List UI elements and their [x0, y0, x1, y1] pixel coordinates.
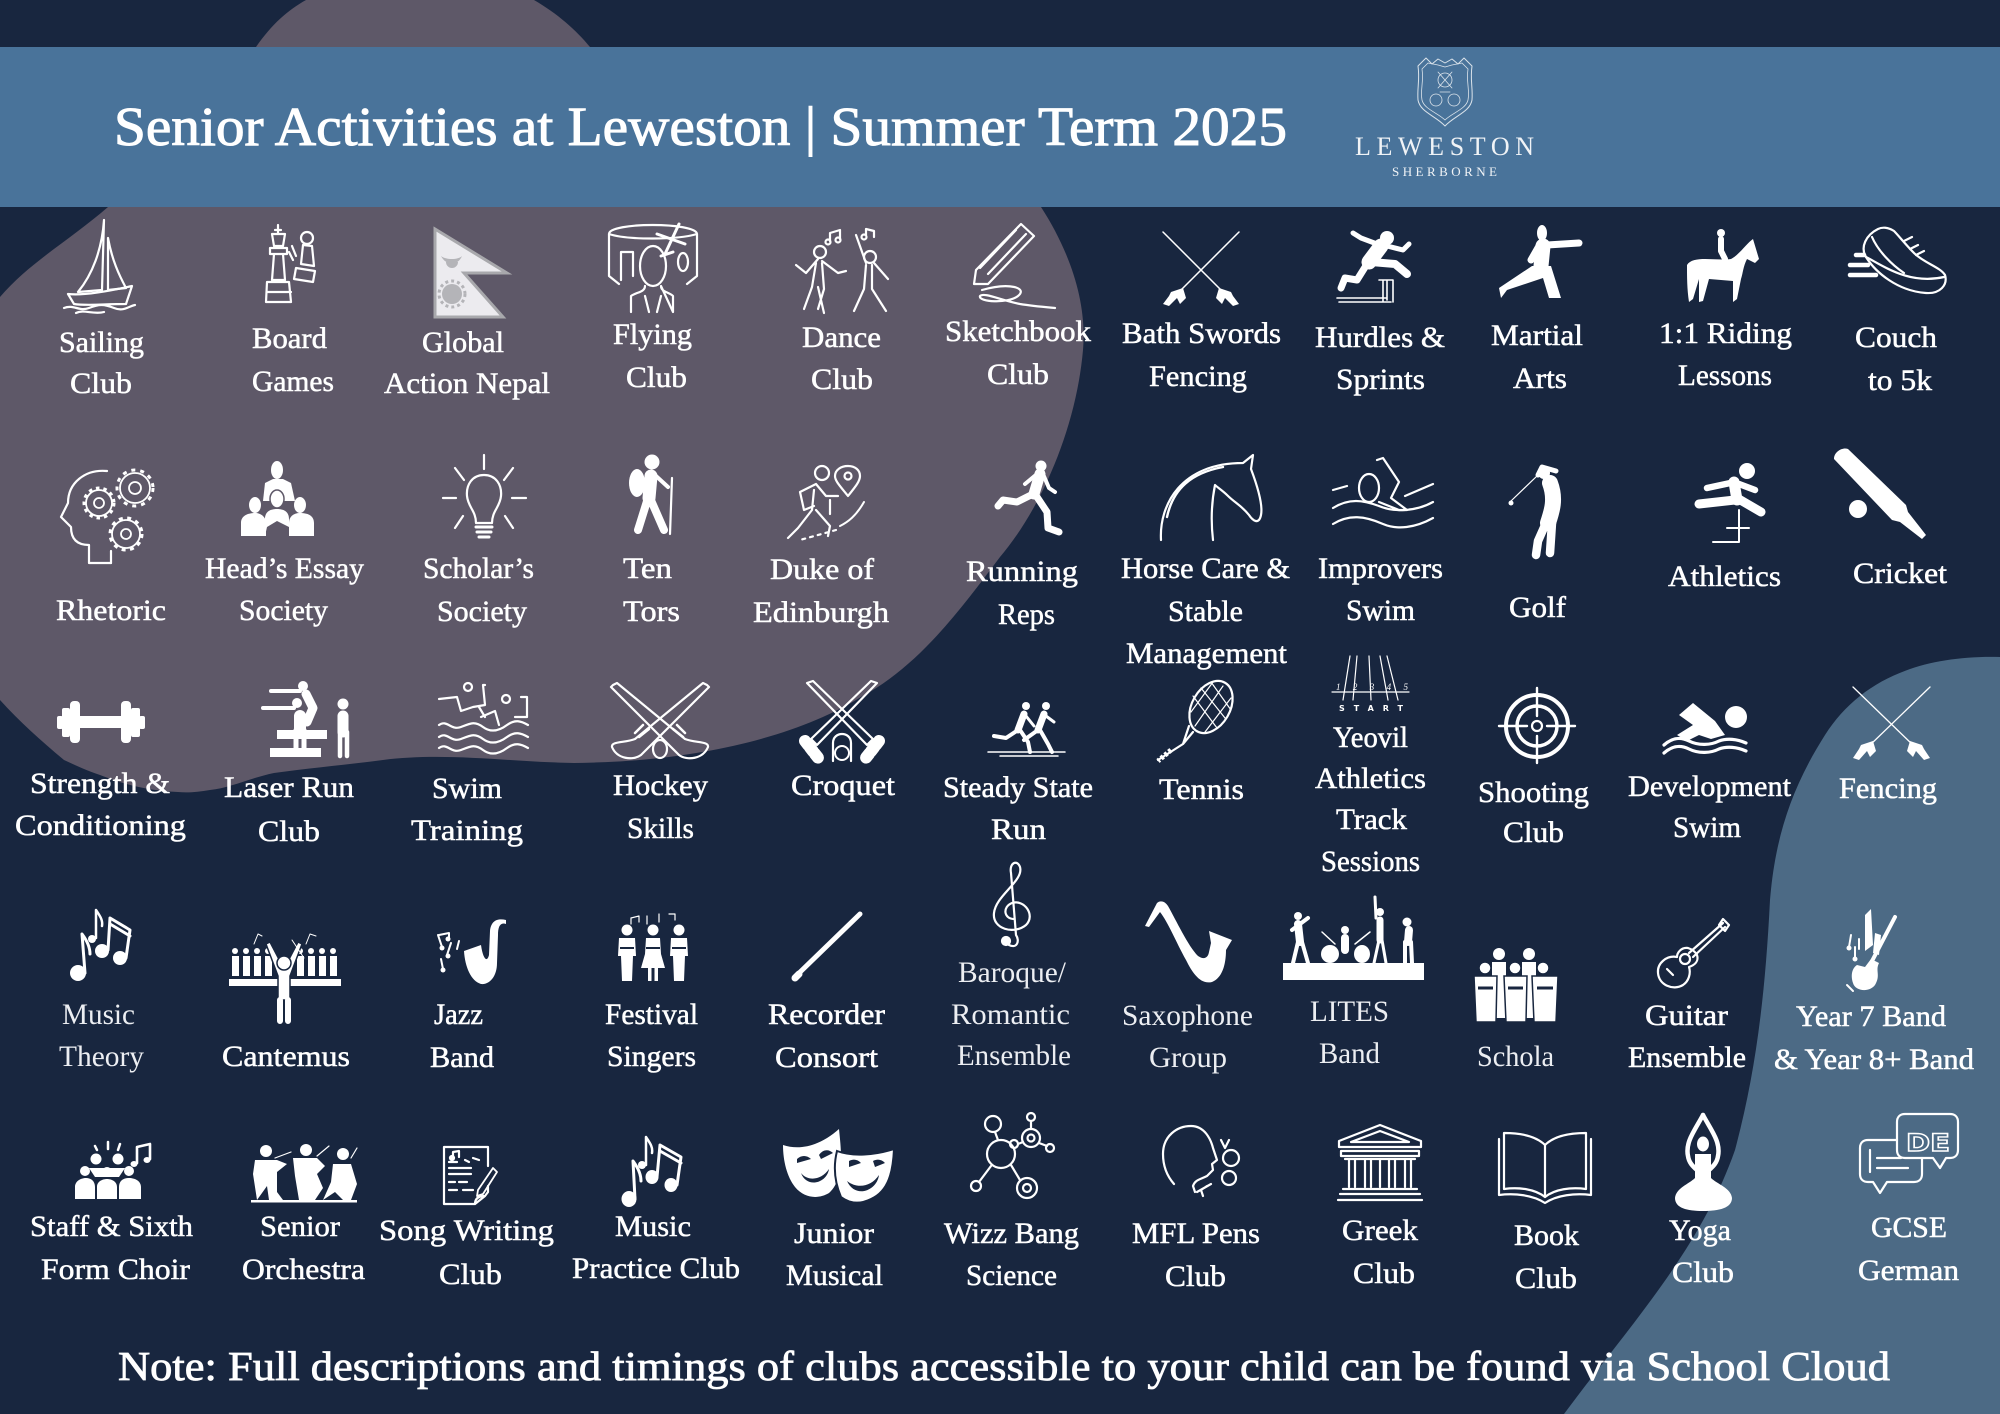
label: [1858, 1211, 1959, 1287]
label: [1478, 776, 1589, 849]
label: [379, 1214, 554, 1291]
icon: croquet mallets and hoop: [805, 681, 879, 761]
label: Improvers: [1318, 552, 1443, 585]
icon: band on stage: [1283, 897, 1424, 980]
decorative shape: blue corner blob: [1564, 657, 2000, 1414]
label: Wizz Bang: [944, 1217, 1079, 1250]
label: Orchestra: [242, 1253, 365, 1286]
activity: Steady State Run: [943, 702, 1093, 846]
label: Bath Swords: [1122, 317, 1281, 350]
label: [1628, 770, 1792, 844]
icon: golfer: [1508, 467, 1556, 555]
label: [1122, 317, 1281, 393]
label: [1659, 317, 1792, 392]
label: Lessons: [1678, 359, 1772, 392]
label: Running: [966, 555, 1078, 588]
activity: Ten Tors: [623, 454, 680, 628]
activity: Song Writing Club: [379, 1147, 554, 1291]
icon: running shoe: [1850, 228, 1946, 293]
label: Saxophone: [1122, 999, 1253, 1032]
icon: instruments and guitar: [1846, 909, 1895, 991]
icon: running track start: START: [1339, 704, 1404, 713]
label: Ensemble: [957, 1039, 1071, 1072]
label: Hurdles &: [1315, 321, 1445, 354]
activity: Year 7 Band & Year 8+ Band: [1774, 909, 1974, 1076]
icon: laser shooters: [263, 681, 348, 757]
icon: chess pieces: [266, 225, 315, 302]
label: Club: [1503, 816, 1564, 849]
label: Tennis: [1159, 773, 1244, 806]
activity: Improvers Swim: [1318, 458, 1443, 627]
activity: Baroque/Romantic Ensemble: [951, 863, 1071, 1072]
icon: choir with note: [75, 1142, 150, 1199]
label: [411, 772, 523, 847]
label: Cantemus: [222, 1040, 350, 1073]
activity: LITES Band: [1283, 897, 1424, 1070]
activity: Head's Essay Society: [205, 461, 364, 627]
label: [1132, 1217, 1260, 1293]
label: Rhetoric: [56, 594, 166, 627]
activity: Schola: [1474, 948, 1558, 1073]
activity: Duke of Edinburgh: [753, 466, 889, 629]
activity: Recorder Consort: [768, 914, 885, 1074]
label: Games: [252, 365, 334, 398]
icon: two dancers: [796, 229, 888, 313]
header band: [0, 47, 2000, 207]
label: Form Choir: [41, 1253, 190, 1286]
label: Fencing: [1149, 360, 1247, 393]
label: [1514, 1219, 1579, 1295]
activity: Hockey Skills: [611, 683, 709, 845]
label: Junior: [794, 1217, 874, 1250]
label: Training: [411, 814, 523, 847]
icon: three singers: [618, 914, 688, 981]
icon: crossed foils: [1853, 687, 1930, 760]
label: Edinburgh: [753, 596, 889, 629]
label: [802, 321, 881, 396]
icon: saxophone: [1145, 901, 1232, 982]
activity: Laser Run Club: [224, 681, 354, 848]
label: Science: [966, 1259, 1057, 1292]
activity: Sailing Club: [59, 220, 144, 400]
icon: hiker: [629, 454, 672, 534]
label: [786, 1217, 883, 1292]
label: [224, 771, 354, 848]
activity: Bath Swords Fencing: [1122, 232, 1281, 393]
icon: music notes: [70, 910, 130, 981]
label: Action Nepal: [384, 367, 550, 400]
label: Development: [1628, 770, 1792, 803]
icon: bat and ball: [1834, 449, 1926, 539]
activity: Hurdles & Sprints: [1315, 231, 1445, 396]
icon: hurdler: [1337, 231, 1409, 302]
label: Music: [615, 1210, 691, 1243]
label: [966, 555, 1078, 631]
icon: runner: [998, 460, 1059, 532]
label: Global: [422, 326, 504, 359]
label: [1315, 321, 1445, 396]
label: Conditioning: [15, 809, 186, 842]
label: Hockey: [613, 769, 708, 802]
icon: martial artist: [1499, 225, 1579, 298]
label: Year 7 Band: [1796, 1000, 1946, 1033]
label: [1491, 319, 1583, 395]
label: Duke of: [770, 553, 874, 586]
icon: open book: [1499, 1133, 1591, 1203]
label: [1628, 999, 1746, 1074]
label: GCSE: [1871, 1211, 1947, 1244]
icon: greek temple: [1338, 1125, 1422, 1200]
label: [15, 767, 186, 842]
activity: Tennis: [1158, 673, 1244, 806]
icon: swimmer outline: [1333, 458, 1433, 527]
label: [252, 322, 334, 398]
activity: Wizz Bang Science: [944, 1113, 1079, 1292]
label: Practice Club: [572, 1252, 740, 1285]
label: Swim: [1673, 811, 1741, 844]
activity: Jazz Band: [430, 919, 506, 1074]
label: Swim: [432, 772, 502, 805]
label: Golf: [1509, 591, 1566, 624]
label: LITES: [1310, 995, 1389, 1028]
icon: climber with map pin: [788, 466, 864, 540]
activity: Board Games: [252, 225, 334, 398]
activity: Music Theory: [59, 910, 144, 1073]
label: [59, 326, 144, 400]
label: Club: [1353, 1257, 1415, 1290]
label: Shooting: [1478, 776, 1589, 809]
icon: dumbbell: [57, 701, 145, 743]
icon: recorder: [795, 914, 860, 978]
activity: Croquet: [791, 681, 896, 802]
icon: athlete over hurdle: [1699, 463, 1761, 542]
label: Ensemble: [1628, 1041, 1746, 1074]
label: Greek: [1342, 1214, 1418, 1247]
label: [423, 552, 534, 628]
label: Athletics: [1668, 560, 1781, 593]
icon: horse and rider: [1687, 229, 1759, 302]
label: Strength &: [30, 767, 170, 800]
label: Track: [1336, 803, 1407, 836]
icon: light bulb: [443, 455, 526, 537]
icon: pencil and squiggle: [974, 224, 1055, 308]
label: Song Writing: [379, 1214, 554, 1247]
icon: tennis racket: [1158, 673, 1241, 761]
label: Dance: [802, 321, 881, 354]
label: [430, 998, 494, 1074]
activity: Dance Club: [796, 229, 888, 396]
label: Couch: [1855, 321, 1937, 354]
activity: Sketchbook Club: [945, 224, 1091, 391]
activity: Music Practice Club: [572, 1137, 740, 1285]
label: Senior: [260, 1210, 340, 1243]
activity: Guitar Ensemble: [1628, 919, 1746, 1074]
label: [1122, 999, 1253, 1074]
icon: sailboat: [64, 220, 135, 313]
label: Recorder: [768, 998, 885, 1031]
label: Horse Care &: [1121, 552, 1290, 585]
label: & Year 8+ Band: [1774, 1043, 1974, 1076]
icon: theatre masks: [783, 1129, 894, 1203]
label: Tors: [623, 595, 680, 628]
icon: profile speaking letters: [1163, 1126, 1239, 1196]
label: Consort: [775, 1041, 879, 1074]
label: Festival: [605, 998, 698, 1031]
icon: treble clef: [994, 863, 1030, 946]
icon: string players: [251, 1144, 357, 1202]
label: Singers: [607, 1040, 696, 1073]
label: to 5k: [1868, 364, 1932, 397]
activity: 1:1 Riding Lessons: [1659, 229, 1792, 392]
label: Schola: [1477, 1040, 1554, 1073]
label: Board: [252, 322, 327, 355]
wordmark: LEWESTON: [1355, 132, 1534, 161]
activity: Athletics: [1668, 463, 1781, 593]
label: Band: [1319, 1037, 1380, 1070]
label: [1315, 721, 1426, 878]
icon: yoga pose: [1675, 1115, 1732, 1211]
icon: horse head: [1161, 455, 1261, 540]
label: Sessions: [1321, 845, 1420, 878]
activity: Junior Musical: [783, 1129, 894, 1292]
label: [613, 769, 708, 845]
label: Run: [991, 813, 1046, 846]
activity: Horse Care & Stable Management: [1121, 455, 1290, 670]
label: Romantic: [951, 998, 1070, 1031]
label: Guitar: [1645, 999, 1728, 1032]
label: Ten: [623, 552, 672, 585]
icon: music sheet and pencil: [444, 1147, 497, 1204]
activity: Yeovil Athletics Track Sessions: [1315, 656, 1426, 878]
icon: crossed foils: [1163, 232, 1239, 306]
label: Cricket: [1853, 557, 1948, 590]
activity: Shooting Club: [1478, 688, 1589, 849]
label: [944, 1217, 1079, 1292]
label: Swim: [1346, 594, 1415, 627]
label: Reps: [998, 598, 1055, 631]
label: Scholar’s: [423, 552, 534, 585]
label: Yoga: [1669, 1214, 1731, 1247]
label: [30, 1210, 193, 1286]
label: Arts: [1513, 362, 1567, 395]
label: Book: [1514, 1219, 1579, 1252]
activity: Staff & Sixth Form Choir: [30, 1142, 193, 1286]
activity: Fencing: [1839, 687, 1937, 805]
label: [572, 1210, 740, 1285]
label: Sailing: [59, 326, 144, 359]
label: Club: [1515, 1262, 1577, 1295]
icon: crossed hockey sticks: [611, 683, 709, 758]
activity: Festival Singers: [605, 914, 698, 1073]
label: [1121, 552, 1290, 670]
label: Fencing: [1839, 772, 1937, 805]
label: [205, 552, 364, 627]
label: [1310, 995, 1389, 1070]
activity: Yoga Club: [1669, 1115, 1734, 1289]
label: Club: [811, 363, 873, 396]
label: Management: [1126, 637, 1288, 670]
label: [1318, 552, 1443, 627]
label: Stable: [1168, 595, 1243, 628]
activity: MFL Pens Club: [1132, 1126, 1260, 1293]
label: Sketchbook: [945, 315, 1091, 348]
icon: crest: [1418, 58, 1472, 126]
icon: acoustic guitar: [1658, 919, 1729, 987]
label: [613, 318, 692, 394]
icon: swimmer silhouette: [1664, 703, 1747, 753]
label: Head’s Essay: [205, 552, 364, 585]
activity: Martial Arts: [1491, 225, 1583, 395]
icon: head with gears: [61, 470, 153, 563]
label: MFL Pens: [1132, 1217, 1260, 1250]
icon: target crosshair: [1499, 688, 1575, 763]
icon: saxophone and notes: [438, 919, 506, 984]
label: 1:1 Riding: [1659, 317, 1792, 350]
label: [1855, 321, 1937, 397]
label: Skills: [627, 812, 694, 845]
icon: choir group: [1474, 948, 1558, 1022]
label: [943, 771, 1093, 846]
label: [1774, 1000, 1974, 1076]
label: [605, 998, 698, 1073]
label: Club: [70, 367, 132, 400]
activity: Scholar's Society: [423, 455, 534, 628]
label: [768, 998, 885, 1074]
icon: synchronised swimmers: [439, 683, 528, 754]
activity: Running Reps: [966, 460, 1078, 631]
label: [945, 315, 1091, 391]
label: Baroque/: [958, 956, 1067, 989]
label: Group: [1149, 1041, 1227, 1074]
icon: speech bubbles DE: DE: [1906, 1129, 1950, 1157]
label: Band: [430, 1041, 494, 1074]
label: Jazz: [434, 998, 483, 1031]
activity: Senior Orchestra: [242, 1144, 365, 1286]
label: [951, 956, 1071, 1072]
sub wordmark: SHERBORNE: [1392, 164, 1497, 179]
label: Sprints: [1336, 363, 1425, 396]
label: Laser Run: [224, 771, 354, 804]
label: Club: [987, 358, 1049, 391]
icon: two runners: [988, 702, 1065, 756]
icon: choir and conductor: [229, 934, 341, 1021]
footer note: Note: Full descriptions and timings of clubs accessible to your child can be found via School Cloud: [118, 1343, 1890, 1389]
label: [1669, 1214, 1734, 1289]
label: Theory: [59, 1040, 144, 1073]
icon: running track start: [1332, 656, 1409, 713]
label: Flying: [613, 318, 692, 351]
label: Club: [258, 815, 320, 848]
label: Athletics: [1315, 762, 1426, 795]
icon: running track start: 12345: [1336, 682, 1408, 692]
logo: Leweston crest and wordmark: [1355, 58, 1534, 179]
label: [1342, 1214, 1418, 1290]
activity: Greek Club: [1338, 1125, 1422, 1290]
label: Club: [626, 361, 687, 394]
activity: Development Swim: [1628, 703, 1792, 844]
label: [753, 553, 889, 629]
title: Senior Activities at Leweston | Summer Term 2025: [114, 96, 1287, 157]
activity: Book Club: [1499, 1133, 1591, 1295]
activity: Cantemus: [222, 934, 350, 1073]
label: Music: [62, 998, 135, 1031]
icon: molecule: [971, 1113, 1054, 1198]
label: Croquet: [791, 769, 896, 802]
activity: Saxophone Group: [1122, 901, 1253, 1074]
activity: Flying Club: [609, 224, 697, 394]
icon: speaker and audience: [241, 461, 314, 536]
icon: Nepal flag: [435, 229, 507, 317]
label: [242, 1210, 365, 1286]
label: Club: [1165, 1260, 1226, 1293]
label: Martial: [1491, 319, 1583, 352]
label: [384, 326, 550, 400]
label: Musical: [786, 1259, 883, 1292]
activity: Strength & Conditioning: [15, 701, 186, 842]
icon: speech bubbles DE: [1860, 1114, 1958, 1193]
label: Staff & Sixth: [30, 1210, 193, 1243]
icon: flight simulator: [609, 224, 697, 312]
activity: Couch to 5k: [1850, 228, 1946, 397]
label: [623, 552, 680, 628]
label: Yeovil: [1333, 721, 1408, 754]
label: Society: [437, 595, 527, 628]
label: Club: [1672, 1256, 1734, 1289]
activity: GCSE German: [1858, 1114, 1959, 1287]
icon: music notes: [622, 1137, 681, 1207]
activity: Cricket: [1834, 449, 1948, 590]
label: Society: [239, 594, 328, 627]
decorative shape: mauve blob: [0, 0, 1084, 792]
activity: Swim Training: [411, 683, 528, 847]
label: [59, 998, 144, 1073]
activity: Golf: [1508, 467, 1566, 624]
label: Steady State: [943, 771, 1093, 804]
activity: Rhetoric: [56, 470, 166, 627]
label: Club: [439, 1258, 502, 1291]
activity: Global Action Nepal: [384, 229, 550, 400]
label: German: [1858, 1254, 1959, 1287]
